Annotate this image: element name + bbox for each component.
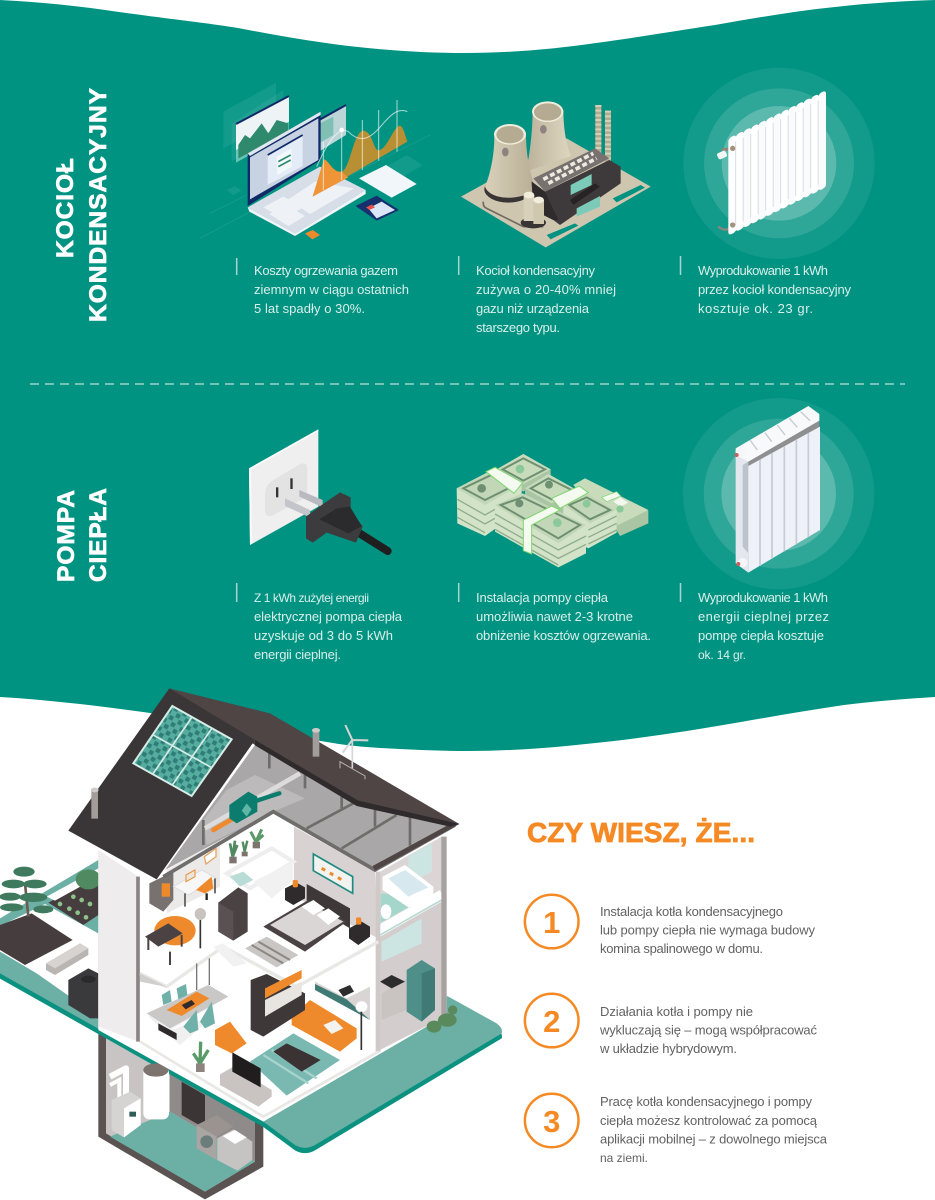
text block: energia z 1 kWh: uzyskuje od 3 do 5 kWh xyxy=(254,628,393,643)
fact 3: na ziemi. xyxy=(600,1151,648,1165)
fact 2: 2 xyxy=(543,1004,560,1039)
text block: koszt pompy xyxy=(680,583,829,662)
fact 3: Pracę kotła kondensacyjnego i pompy xyxy=(600,1094,812,1109)
icon: radiator with heat circles xyxy=(683,68,875,259)
text block: zużycie gazu xyxy=(459,256,616,335)
icon: aluminium radiator with heat circles xyxy=(683,398,874,589)
stack front xyxy=(495,493,586,567)
text block: obniżenie kosztów: obniżenie kosztów ogrzewania. xyxy=(476,628,651,643)
basement equipment xyxy=(110,1063,252,1171)
stack far right xyxy=(573,478,648,536)
text block: koszty ogrzewania: ziemnym w ciągu ostatnich xyxy=(254,282,409,297)
text block: koszt kotła: przez kocioł kondensacyjny xyxy=(698,282,852,297)
text block: koszt kotła xyxy=(680,256,852,316)
green background band xyxy=(0,0,935,751)
stack left xyxy=(457,467,523,536)
text block: obniżenie kosztów xyxy=(459,583,651,643)
text block: koszty ogrzewania: 5 lat spadły o 30%. xyxy=(254,301,365,316)
stack middle right xyxy=(552,486,621,548)
icon: stacks of money xyxy=(457,454,648,567)
text block: koszt kotła: kosztuje ok. 23 gr. xyxy=(698,301,813,316)
text block: koszty ogrzewania xyxy=(237,258,409,316)
fact 1 xyxy=(525,895,816,956)
fact 2: w układzie hybrydowym. xyxy=(599,1041,737,1056)
left pillar xyxy=(98,850,138,1042)
text block: zużycie gazu: zużywa o 20-40% mniej xyxy=(476,282,616,297)
wind turbine xyxy=(340,725,368,779)
heading: kocioł kondensacyjny xyxy=(52,88,112,322)
roof vents xyxy=(91,728,320,819)
text block: koszt pompy: Wyprodukowanie 1 kWh xyxy=(698,590,828,605)
text block: energia z 1 kWh xyxy=(237,583,403,662)
stack middle back xyxy=(525,474,577,520)
stack back xyxy=(497,454,551,492)
fact 2: Działania kotła i pompy nie xyxy=(600,1004,753,1019)
garden xyxy=(0,867,101,1018)
fact 1: komina spalinowego w domu. xyxy=(600,941,763,956)
heading: pompa ciepła: CIEPŁA xyxy=(85,488,112,582)
fact 3 xyxy=(525,1094,828,1165)
ground plate rim xyxy=(0,865,502,1153)
heading: kocioł kondensacyjny: KONDENSACYJNY xyxy=(85,88,112,322)
text block: zużycie gazu: gazu niż urządzenia xyxy=(476,301,590,316)
fact 1: 1 xyxy=(543,905,560,940)
fact 2 xyxy=(525,994,818,1056)
icon: electric plug in socket xyxy=(249,429,388,551)
fact 3: ciepła możesz kontrolować za pomocą xyxy=(600,1113,818,1128)
ground plate xyxy=(0,860,502,1148)
basement xyxy=(98,1027,263,1199)
text block: koszt pompy: ok. 14 gr. xyxy=(698,648,746,662)
text block: energia z 1 kWh: Z 1 kWh zużytej energii xyxy=(254,591,369,605)
heading: pompa ciepła: POMPA xyxy=(53,490,80,582)
house interior base xyxy=(98,847,447,1122)
text block: zużycie gazu: starszego typu. xyxy=(476,320,560,335)
text block: koszt kotła: Wyprodukowanie 1 kWh xyxy=(698,263,828,278)
back wall and bathroom xyxy=(294,827,444,1052)
illustration: isometric house xyxy=(0,688,502,1199)
heading: pompa ciepła xyxy=(53,488,112,582)
heading: czy wiesz: CZY WIESZ, ŻE... xyxy=(527,817,755,848)
attic xyxy=(163,745,455,877)
icon: laptop with charts xyxy=(200,83,430,239)
text block: obniżenie kosztów: umożliwia nawet 2-3 krotne xyxy=(476,609,633,624)
fact 3: 3 xyxy=(543,1104,560,1139)
text block: koszt pompy: pompę ciepła kosztuje xyxy=(698,628,824,643)
text block: obniżenie kosztów: Instalacja pompy ciepła xyxy=(476,590,609,605)
fact 2: wykluczają się – mogą współpracować xyxy=(599,1022,818,1038)
heading: kocioł kondensacyjny: KOCIOŁ xyxy=(52,158,79,258)
icon: power plant xyxy=(461,101,651,247)
text block: koszty ogrzewania: Koszty ogrzewania gazem xyxy=(254,263,398,278)
text block: energia z 1 kWh: elektrycznej pompa ciepła xyxy=(254,609,403,624)
lower floor room xyxy=(140,958,457,1117)
fact 1: Instalacja kotła kondensacyjnego xyxy=(600,904,783,919)
fact 3: aplikacji mobilnej – z dowolnego miejsca xyxy=(600,1132,828,1146)
upper floor room xyxy=(140,829,378,987)
roof xyxy=(68,688,459,879)
text block: zużycie gazu: Kocioł kondensacyjny xyxy=(476,263,596,278)
text block: koszt pompy: energii cieplnej przez xyxy=(698,609,829,624)
fact 1: lub pompy ciepła nie wymaga budowy xyxy=(600,922,816,938)
solar panels xyxy=(133,706,232,796)
text block: energia z 1 kWh: energii cieplnej. xyxy=(254,647,341,662)
